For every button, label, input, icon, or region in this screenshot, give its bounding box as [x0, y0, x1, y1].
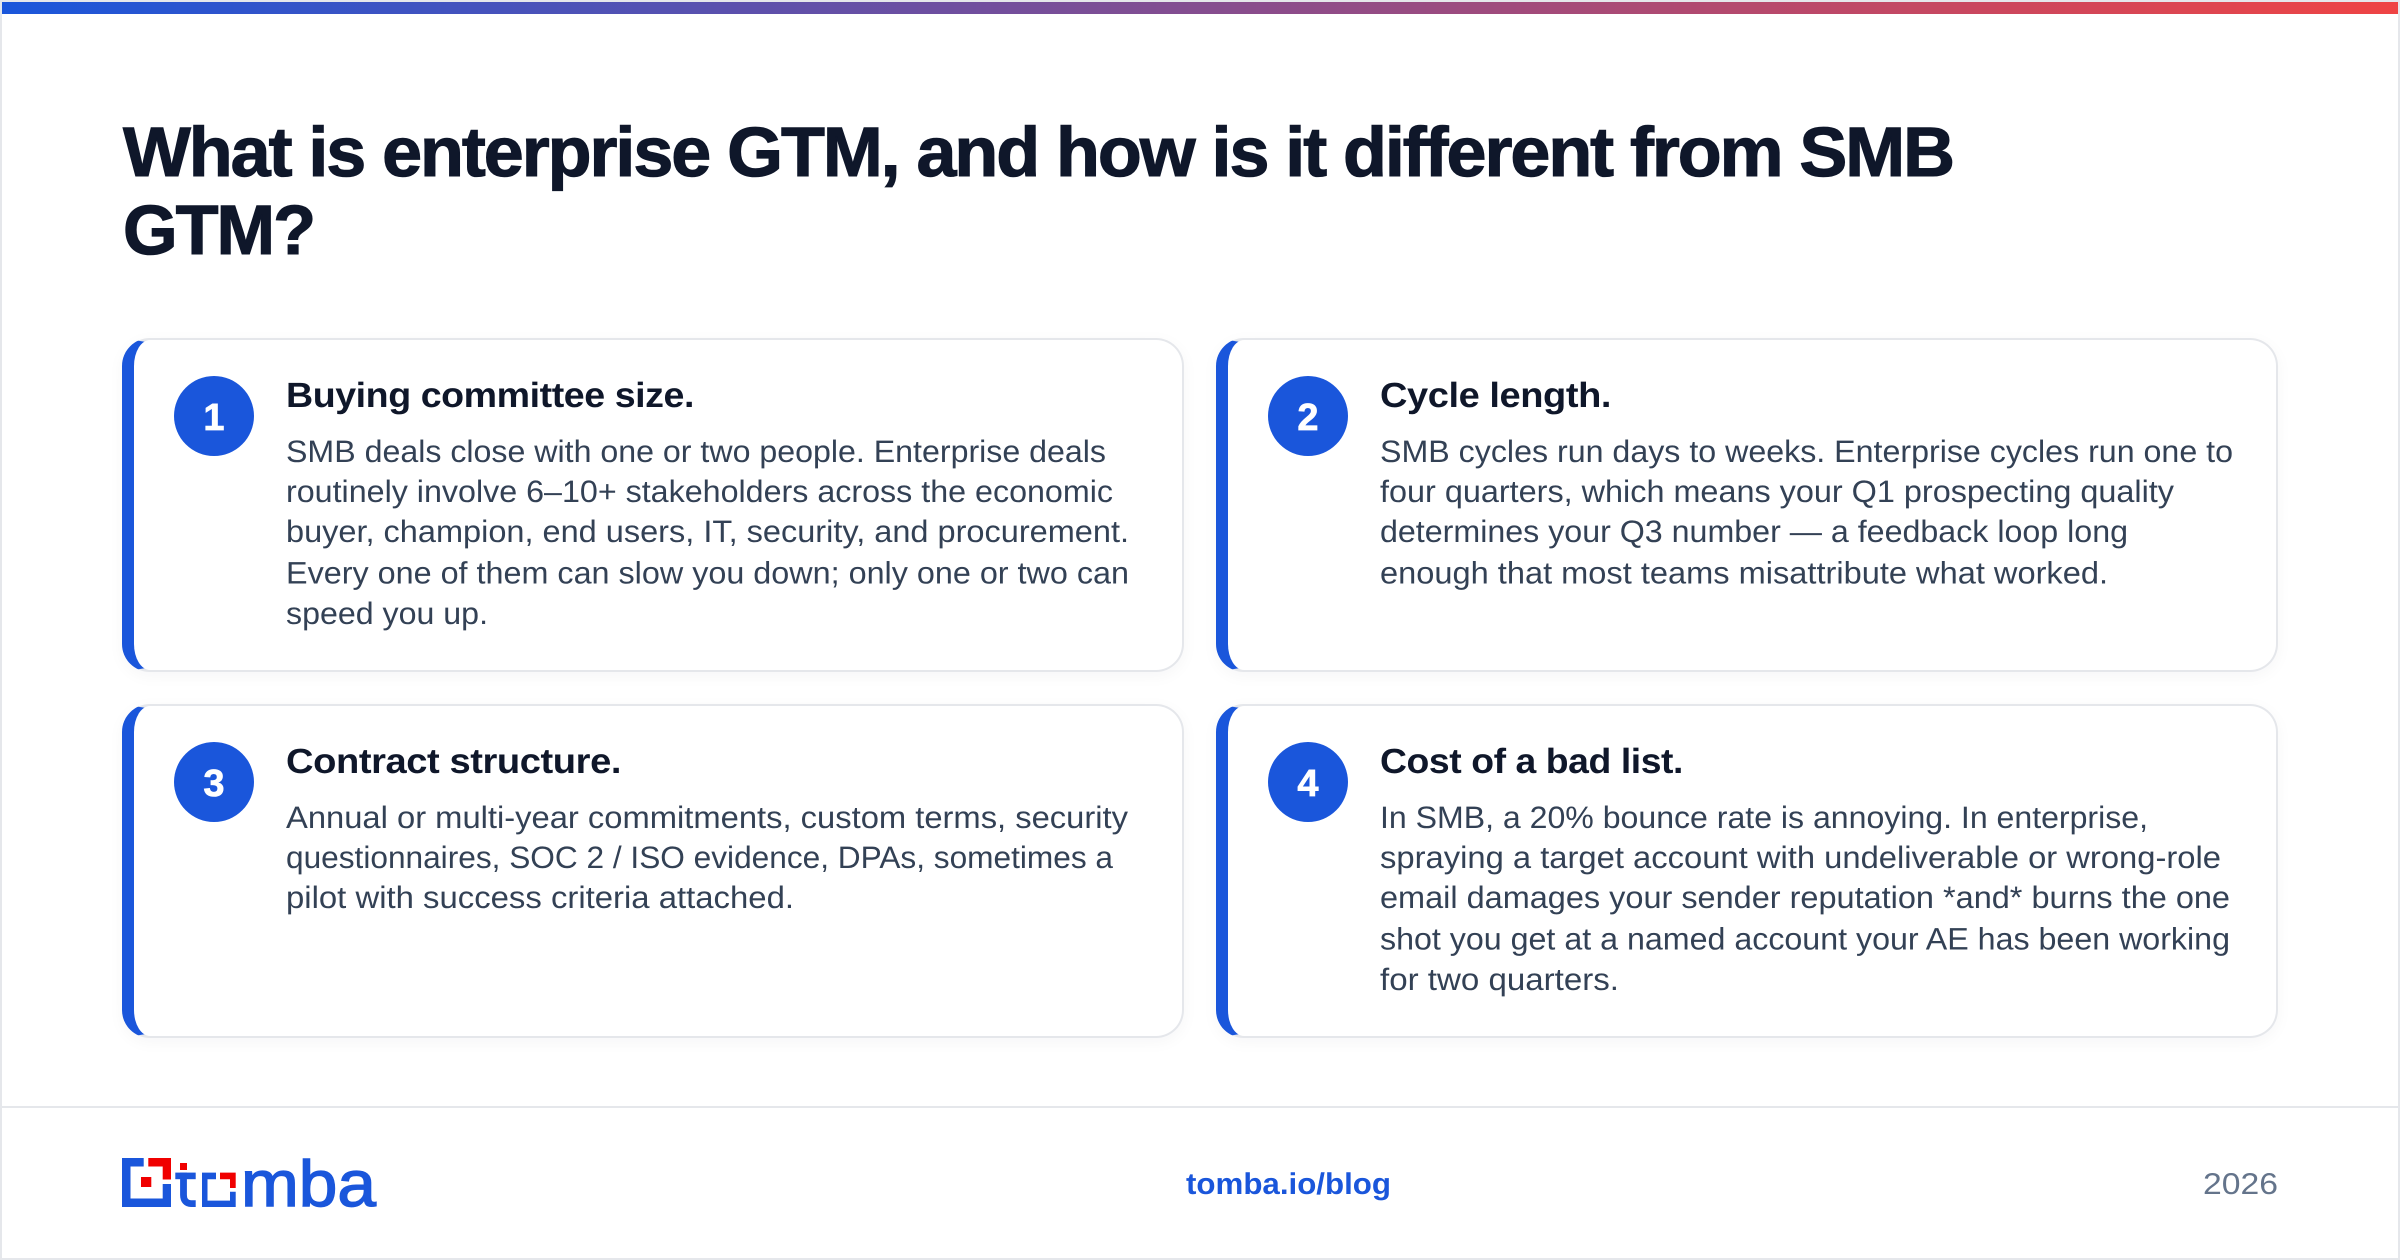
- heading: buying committee size: Buying committee size.: [286, 376, 694, 415]
- body text: contract structure: [286, 800, 1129, 915]
- footer link: tomba.io/blog: [1186, 1168, 1391, 1201]
- number badge 4: 4: [1297, 763, 1319, 805]
- number badge 2: [1268, 376, 1348, 456]
- body text: buying committee size: SMB deals close with one or two people. Enterprise deals: [286, 434, 1106, 469]
- body text: cost of a bad list: email damages your sender reputation *and* burns the one: [1380, 880, 2230, 915]
- heading: cycle length: Cycle length.: [1380, 376, 1611, 415]
- body text: cycle length: enough that most teams misattribute what worked.: [1380, 556, 2108, 590]
- heading: cost of a bad list: Cost of a bad list.: [1380, 742, 1683, 781]
- number badge 3: [174, 742, 254, 822]
- icon: logo square mark: [122, 1158, 171, 1207]
- panel: cycle length: [1216, 338, 2278, 672]
- body text: buying committee size: routinely involve 6–10+ stakeholders across the economic: [286, 474, 1113, 509]
- body text: contract structure: Annual or multi-year commitments, custom terms, security: [286, 800, 1129, 835]
- heading: contract structure: Contract structure.: [286, 742, 621, 781]
- number badge 1: 1: [203, 397, 225, 439]
- body text: cycle length: [1380, 434, 2233, 590]
- panel: cost of a bad list: [1216, 704, 2278, 1038]
- body text: buying committee size: [286, 434, 1129, 631]
- body text: contract structure: questionnaires, SOC 2 / ISO evidence, DPAs, sometimes a: [286, 840, 1114, 875]
- body text: buying committee size: Every one of them can slow you down; only one or two can: [286, 556, 1129, 590]
- logo: tomba: [122, 1147, 377, 1220]
- body text: buying committee size: buyer, champion, end users, IT, security, and procurement.: [286, 514, 1129, 549]
- number badge 2: 2: [1297, 397, 1319, 439]
- panel: contract structure: [122, 704, 1184, 1038]
- body text: buying committee size: speed you up.: [286, 596, 488, 631]
- body text: cost of a bad list: In SMB, a 20% bounce rate is annoying. In enterprise,: [1380, 800, 2148, 835]
- body text: cost of a bad list: spraying a target account with undeliverable or wrong-role: [1380, 840, 2221, 875]
- title: GTM?: [123, 191, 314, 269]
- body text: cycle length: SMB cycles run days to weeks. Enterprise cycles run one to: [1380, 434, 2233, 469]
- footer year: 2026: [2203, 1168, 2278, 1201]
- body text: contract structure: pilot with success criteria attached.: [286, 880, 794, 915]
- body text: cost of a bad list: shot you get at a named account your AE has been working: [1380, 922, 2230, 956]
- body text: cycle length: determines your Q3 number — a feedback loop long: [1380, 514, 2128, 549]
- number badge 3: 3: [203, 763, 225, 805]
- body text: cycle length: four quarters, which means your Q1 prospecting quality: [1380, 474, 2175, 509]
- number badge 1: [174, 376, 254, 456]
- body text: cost of a bad list: for two quarters.: [1380, 962, 1619, 997]
- body text: cost of a bad list: [1380, 800, 2230, 997]
- title: [122, 113, 1953, 269]
- icon: logo stylised t and o: [175, 1163, 236, 1207]
- number badge 4: [1268, 742, 1348, 822]
- footer: [2, 1106, 2398, 1258]
- title: What is enterprise GTM, and how is it different from SMB: [123, 113, 1953, 191]
- logo wordmark letters: mba: [241, 1147, 377, 1220]
- panel: buying committee size: [122, 338, 1184, 672]
